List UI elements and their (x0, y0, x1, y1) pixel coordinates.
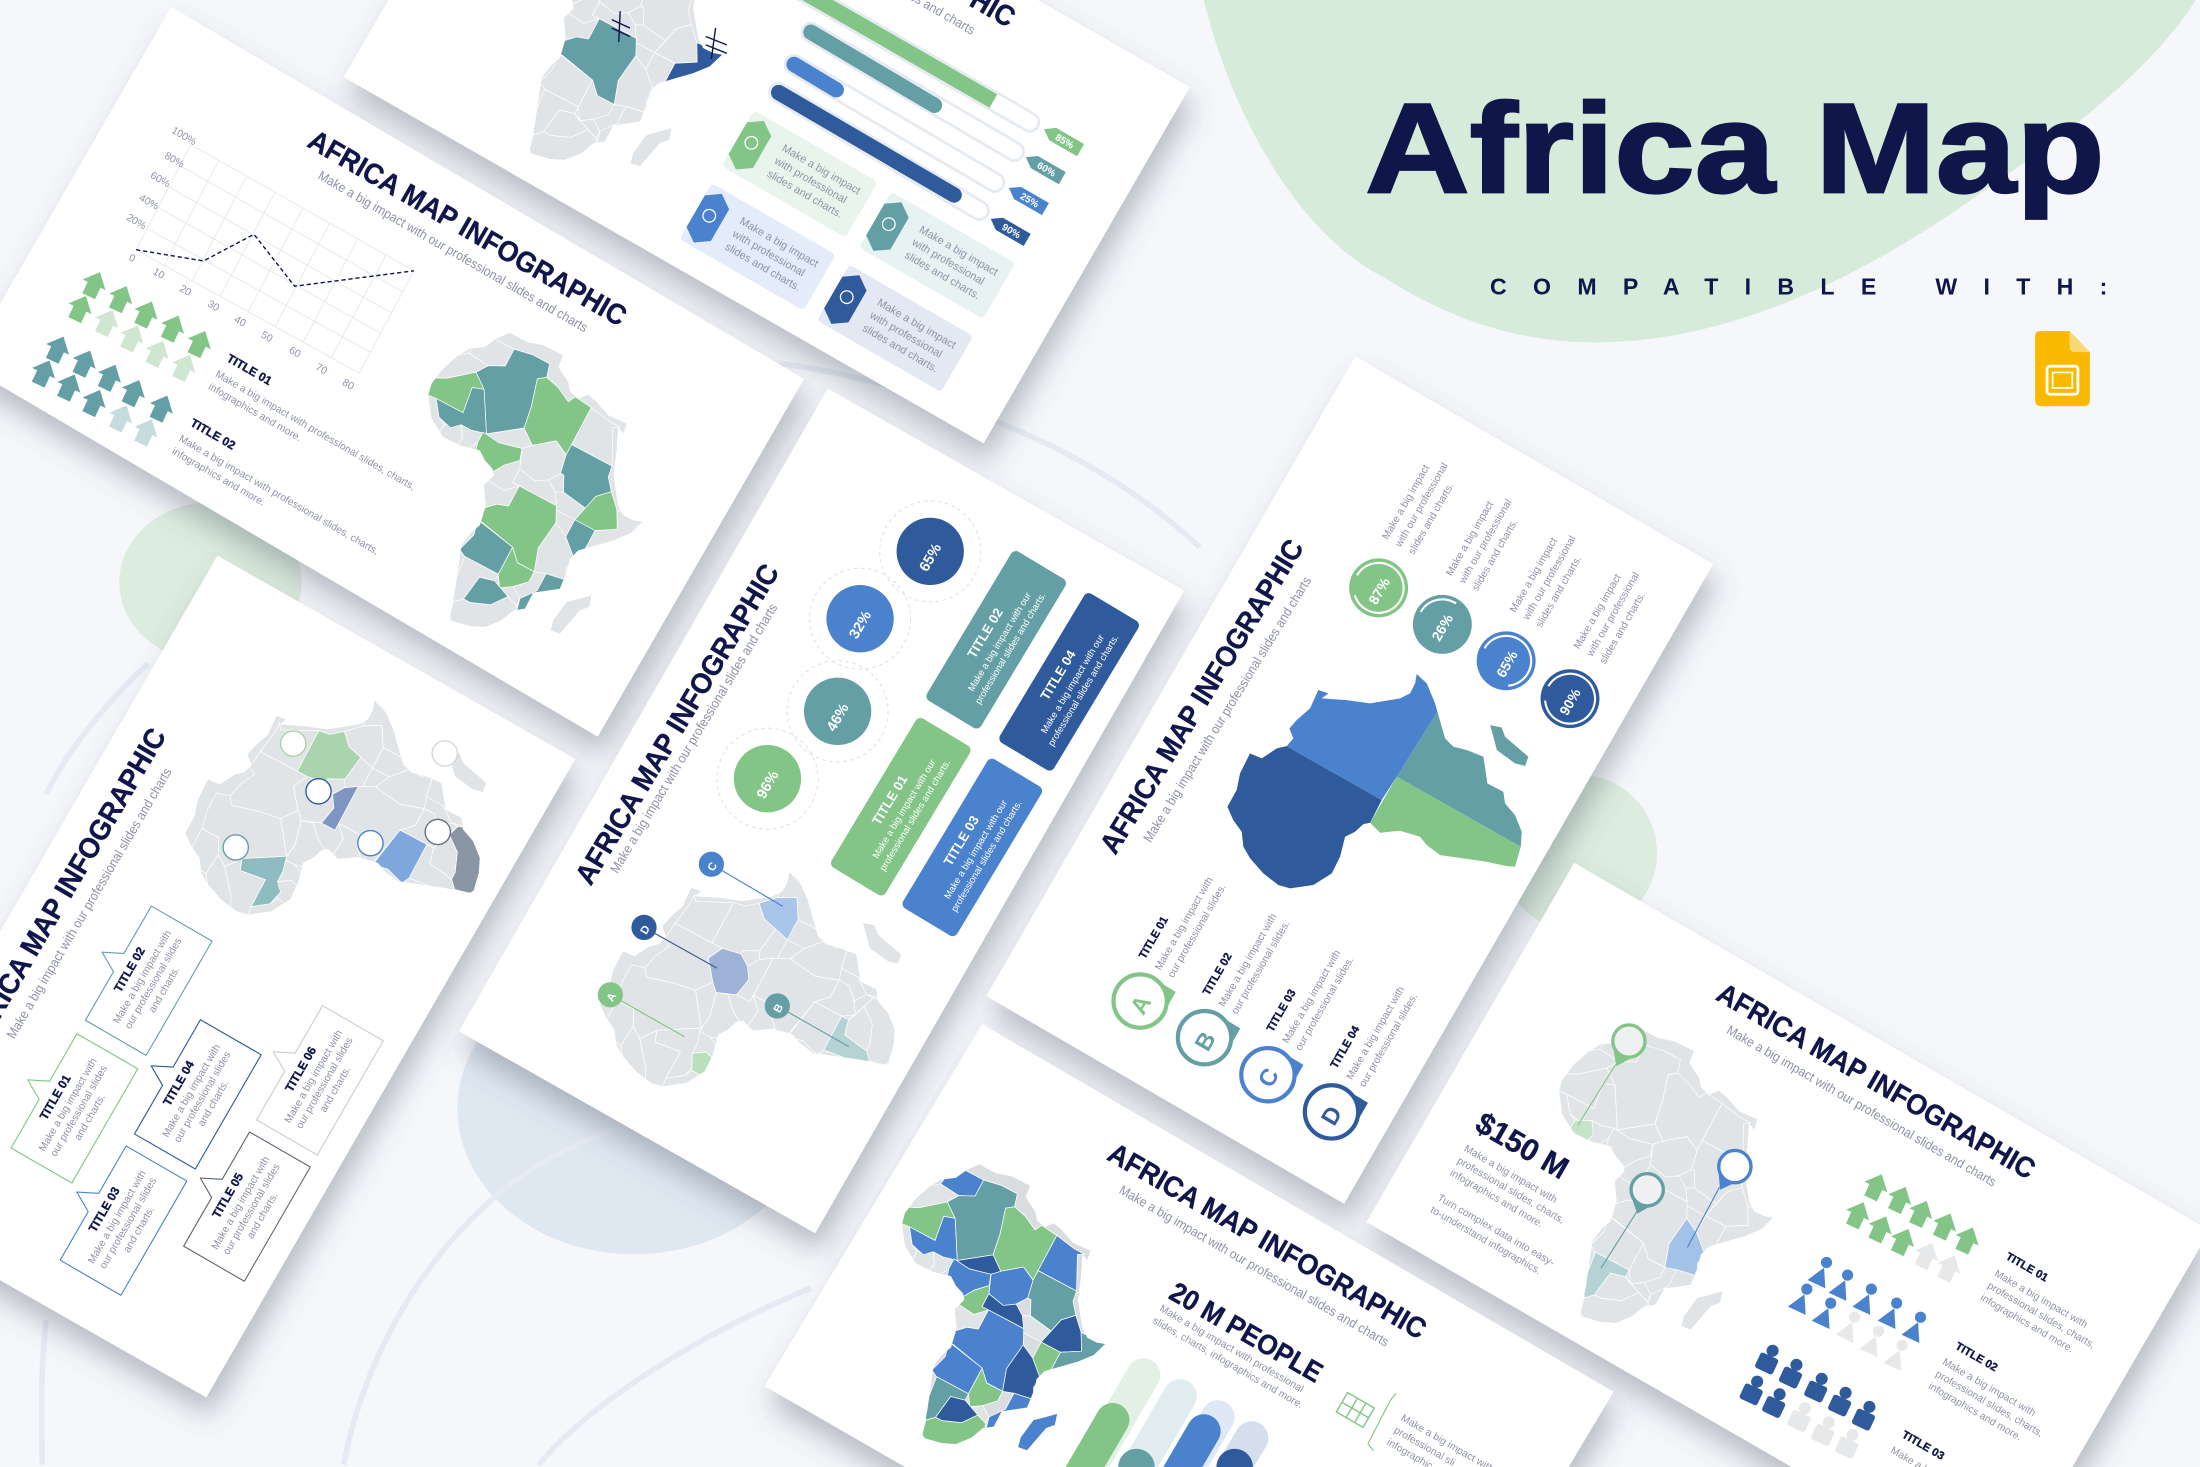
callout: title 06 (240, 996, 383, 1155)
card: title 02 (924, 549, 1068, 731)
subheading: Make a big impact with our professional slides and charts (607, 601, 781, 876)
heading: AFRICA MAP INFOGRAPHIC (302, 124, 632, 333)
ring captions: Make a big impact (1381, 463, 1432, 542)
callout: title 02: and charts. (147, 965, 182, 1015)
map with drop pins (1559, 1023, 1774, 1330)
line chart: 50 (259, 330, 274, 345)
line chart: 100% (169, 125, 198, 148)
percentage circles: 32% (847, 608, 875, 642)
callout: title 02: Make a big impact with (112, 929, 174, 1026)
map with lettered markers: C (706, 860, 720, 873)
text: title 02 (1926, 1341, 2052, 1452)
callout: title 05: our professional slides (222, 1162, 283, 1257)
slide card (344, 0, 1190, 443)
card: title 01 (829, 716, 973, 898)
text: title 01: professional slides, charts, (1985, 1281, 2097, 1351)
slide: four region map (986, 356, 1713, 1204)
ring captions: with our professional (1393, 461, 1451, 550)
map with lettered markers: B (772, 1002, 786, 1015)
progress bars (779, 0, 1030, 210)
line chart: 60% (148, 170, 172, 190)
card: title 03: TITLE 03 (941, 813, 982, 868)
value tags: 25% (1018, 191, 1041, 211)
text: title 02: infographics and more. (170, 446, 267, 509)
text: title 02: infographics and more. (1926, 1381, 2023, 1443)
card: green: Make a big impact (780, 142, 862, 197)
subheading: Make a big impact with our professional slides and charts (1140, 574, 1315, 845)
callout: title 01 (0, 1024, 138, 1183)
stat description: professional slides, charts, (1455, 1156, 1566, 1226)
legend text: title 04: our professional slides. (1358, 992, 1420, 1089)
card: blue: with professional (729, 228, 807, 279)
capsule bars (1066, 1358, 1268, 1467)
slide: map with callouts (0, 556, 575, 1397)
background blob: green left (119, 502, 302, 662)
text: title 02: TITLE 02 (1953, 1341, 1999, 1374)
card: teal: with professional (909, 236, 986, 288)
ring captions: Make a big impact (1572, 573, 1624, 651)
marker: B (1178, 1011, 1240, 1064)
ring captions: slides and charts. (1407, 481, 1457, 557)
pictogram: blue figures (1788, 1253, 1932, 1371)
legend text: title 01: our professional slides. (1166, 882, 1229, 980)
legend text: title 03: our professional slides. (1294, 955, 1356, 1053)
legend text: title 04 (1329, 984, 1420, 1089)
marker: A: A (1125, 991, 1157, 1019)
text: title 01: TITLE 01 (2003, 1251, 2050, 1284)
icon: green map tile (1336, 1393, 1374, 1427)
legend text: title 02: Make a big impact with (1217, 912, 1280, 1009)
stat description: Make a big impact with (1462, 1144, 1559, 1206)
line chart: 70 (313, 362, 329, 377)
card: title 01: Make a big impact with our (871, 758, 939, 860)
card: title 04: professional slides and charts. (1046, 633, 1122, 748)
card: title 03 (900, 757, 1044, 938)
background blob: green right (1500, 774, 1657, 932)
marker: C: C (1253, 1064, 1285, 1092)
ring captions: with our professional (1457, 498, 1515, 587)
pictogram: dark figures (1739, 1341, 1881, 1459)
legend text: title 04: TITLE 04 (1329, 1023, 1363, 1071)
card: blue (680, 183, 836, 311)
slide: people bars and country map (765, 1024, 1614, 1467)
legend text: title 03: TITLE 03 (1265, 988, 1299, 1034)
compatible with label: COMPATIBLE WITH: (1490, 274, 2107, 300)
percentage rings: 90% (1556, 685, 1584, 718)
stat description: to-understand infographics. (1428, 1205, 1543, 1277)
title: Africa Map (1365, 77, 2105, 220)
callout: title 02: TITLE 02 (111, 944, 148, 995)
card: title 02: TITLE 02 (964, 605, 1006, 661)
callout: title 01: Make a big impact with (37, 1057, 100, 1153)
percentage circles (717, 501, 981, 829)
percentage rings: 87% (1365, 574, 1393, 607)
pictogram: green arrows (1841, 1169, 1984, 1285)
legend text: title 02 (1201, 911, 1293, 1016)
slide card (0, 556, 575, 1397)
line chart: 30 (205, 299, 221, 314)
callout: title 06: Make a big impact with (283, 1029, 345, 1125)
percentage rings: 26% (1428, 611, 1456, 644)
callout: title 03: Make a big impact with (87, 1169, 149, 1266)
card: green (722, 110, 878, 238)
stat description: Turn complex data into easy- (1435, 1193, 1556, 1269)
map with lettered markers: A (605, 991, 619, 1004)
callout: title 01: and charts. (73, 1093, 108, 1143)
percentage circles: 96% (754, 768, 783, 802)
card: title 01: TITLE 01 (869, 772, 911, 828)
card: title 03: Make a big impact with our (942, 798, 1010, 901)
card: dark blue: with professional (867, 309, 944, 361)
legend text: title 04: Make a big impact with (1345, 985, 1407, 1082)
text: title 02: professional slides, charts, (1933, 1369, 2045, 1440)
subheading: Make a big impact with our professional slides and charts (1117, 1182, 1392, 1350)
ring captions: slides and charts. (1471, 518, 1520, 593)
card: green: slides and charts. (765, 168, 845, 221)
card: title 04 (997, 591, 1141, 773)
card: dark blue: slides and charts. (860, 322, 940, 375)
legend text: title 03: Make a big impact with (1281, 948, 1343, 1045)
text: title 01: Make a big impact with professional slides, charts, (213, 369, 417, 493)
value tags: 90% (1000, 222, 1022, 241)
card: title 03: professional slides and charts. (949, 798, 1025, 914)
text: title 01 (1978, 1251, 2104, 1363)
slide card (459, 389, 1184, 1233)
legend text: title 01: TITLE 01 (1137, 915, 1171, 961)
ring captions: with our professional (1521, 534, 1578, 623)
ring captions: with our professional (1585, 571, 1642, 659)
slide: circles and cards (459, 389, 1184, 1233)
map: many coloured countries (902, 1164, 1106, 1450)
background arcs (42, 363, 1200, 1465)
ring captions: slides and charts. (1598, 591, 1648, 666)
line chart: 0 (127, 253, 137, 265)
card: green: with professional (771, 155, 849, 206)
slide card (1367, 863, 2200, 1467)
stat description (1428, 1144, 1573, 1281)
text: title 02: Make a big impact with professional slides, charts, (177, 434, 380, 557)
card: title 04: Make a big impact with our (1039, 633, 1107, 736)
ring captions: Make a big impact (1445, 500, 1496, 578)
text: title 02: Make a big impact with (1940, 1357, 2037, 1419)
background blob: green top right (1204, 0, 2196, 342)
slide: progress bars (344, 0, 1190, 443)
map with pins (186, 700, 486, 914)
callout: title 04 (117, 1010, 261, 1169)
percentage circles: 46% (824, 701, 853, 735)
marker: D: D (1316, 1102, 1348, 1130)
line chart: 20% (124, 212, 148, 232)
card: dark blue: Make a big impact (875, 297, 958, 352)
callout: title 06: and charts. (318, 1065, 354, 1115)
text: title 01: TITLE 01 (224, 351, 275, 388)
percentage rings: 65% (1493, 647, 1521, 680)
line chart: 20 (177, 283, 193, 299)
legend text: title 01 (1137, 875, 1229, 980)
map: four regions (1227, 674, 1528, 888)
marker: B: B (1190, 1027, 1222, 1056)
callout: title 03: TITLE 03 (86, 1184, 123, 1234)
subheading: Make a big impact with our professional slides and charts (316, 168, 591, 335)
icon: google slides (2035, 331, 2090, 406)
ring captions (1380, 454, 1655, 667)
callout: title 06: TITLE 06 (282, 1044, 319, 1094)
text: title 03: TITLE 03 (1900, 1429, 1946, 1463)
heading: AFRICA MAP INFOGRAPHIC (1102, 1137, 1432, 1346)
value tags: 85% (1053, 132, 1076, 152)
legend text: title 01: Make a big impact with (1153, 875, 1216, 972)
marker: A (1113, 974, 1176, 1028)
text: title 01: infographics and more. (1978, 1293, 2075, 1355)
heading: AFRICA MAP INFOGRAPHIC (569, 559, 786, 890)
stat description: Make a big impact with professional (1157, 1303, 1305, 1395)
value tags (987, 123, 1084, 246)
callout: title 06: our professional slides (294, 1036, 356, 1131)
text: title 01: Make a big impact with (1992, 1268, 2089, 1331)
callout: title 04: and charts. (196, 1079, 232, 1129)
line chart: 40% (137, 193, 160, 213)
card: teal (859, 192, 1015, 319)
callout: title 02: our professional slides (123, 936, 184, 1031)
callout: title 01: TITLE 01 (37, 1072, 74, 1122)
marker: C (1241, 1048, 1303, 1101)
subheading: Make a big impact with our professional slides and charts (1724, 1022, 1999, 1190)
legend text: title 03 (1265, 948, 1356, 1053)
map with lettered markers: D (638, 924, 653, 937)
ring captions: Make a big impact (1508, 536, 1560, 615)
heading: AFRICA MAP INFOGRAPHIC (1094, 534, 1311, 860)
slide card (986, 356, 1713, 1204)
heading: AFRICA MAP INFOGRAPHIC (1711, 977, 2041, 1186)
text block with bracket (1368, 1393, 1496, 1467)
stat: $150 M: $150 M (1470, 1105, 1575, 1186)
stat description: infographics and more. (1448, 1168, 1545, 1230)
map with pinned countries (530, 0, 722, 166)
line chart: 80 (340, 377, 356, 393)
text: title 01: infographics and more. (206, 382, 303, 444)
callout: title 01: our professional slides (49, 1064, 110, 1159)
card: blue: Make a big impact (737, 215, 820, 270)
ring captions: slides and charts. (1534, 554, 1584, 630)
card: title 04: TITLE 04 (1037, 647, 1079, 703)
value tags: 60% (1035, 160, 1057, 180)
line chart: 80% (162, 151, 186, 171)
text: title 02: TITLE 02 (188, 416, 238, 453)
slide: line chart and map (0, 7, 804, 737)
card: blue: slides and charts. (723, 241, 802, 294)
legend text: title 02: TITLE 02 (1201, 951, 1235, 998)
line chart: 40 (232, 314, 248, 330)
map with lettered markers (598, 852, 901, 1086)
callout: title 05: TITLE 05 (209, 1170, 246, 1220)
card: title 01: professional slides and charts. (878, 758, 953, 873)
callout: title 03: and charts. (122, 1205, 157, 1255)
stat: 20 M people: 20 M PEOPLE (1164, 1276, 1328, 1389)
arrow pictogram: teal (27, 331, 179, 449)
background blob: blue centre (457, 962, 811, 1254)
legend text: title 02: our professional slides. (1230, 919, 1293, 1016)
callout: title 04: TITLE 04 (160, 1058, 197, 1108)
percentage rings (1345, 554, 1604, 733)
callout: title 02 (68, 896, 212, 1055)
callout: title 04: our professional slides (172, 1050, 234, 1145)
marker: D (1305, 1085, 1368, 1139)
slide card (0, 7, 804, 737)
callout: title 05 (167, 1122, 310, 1281)
card: dark blue (817, 265, 973, 392)
arrow pictogram: green (63, 267, 217, 384)
line chart (124, 125, 414, 393)
callout: title 03: our professional slides (98, 1176, 159, 1271)
icon: signposts (612, 11, 727, 59)
map: coloured countries (428, 332, 642, 634)
stat description: slides, charts, infographics and more. (1150, 1316, 1305, 1411)
slide card (765, 1024, 1614, 1467)
callout: title 05: and charts. (245, 1191, 281, 1241)
card: title 02: professional slides and charts. (973, 591, 1049, 706)
card: teal: Make a big impact (917, 224, 1000, 279)
line chart: 60 (287, 345, 302, 361)
callout: title 03 (43, 1136, 187, 1295)
slide: pictograms and pins (1367, 863, 2200, 1467)
callout: title 05: Make a big impact with (210, 1155, 272, 1252)
card: title 02: Make a big impact with our (966, 591, 1034, 694)
card: teal: slides and charts. (902, 249, 982, 302)
subheading: Make a big impact with our professional slides and charts (4, 765, 175, 1041)
percentage circles: 65% (917, 541, 945, 575)
line chart: 10 (151, 267, 166, 282)
callout: title 04: Make a big impact with (161, 1043, 223, 1139)
